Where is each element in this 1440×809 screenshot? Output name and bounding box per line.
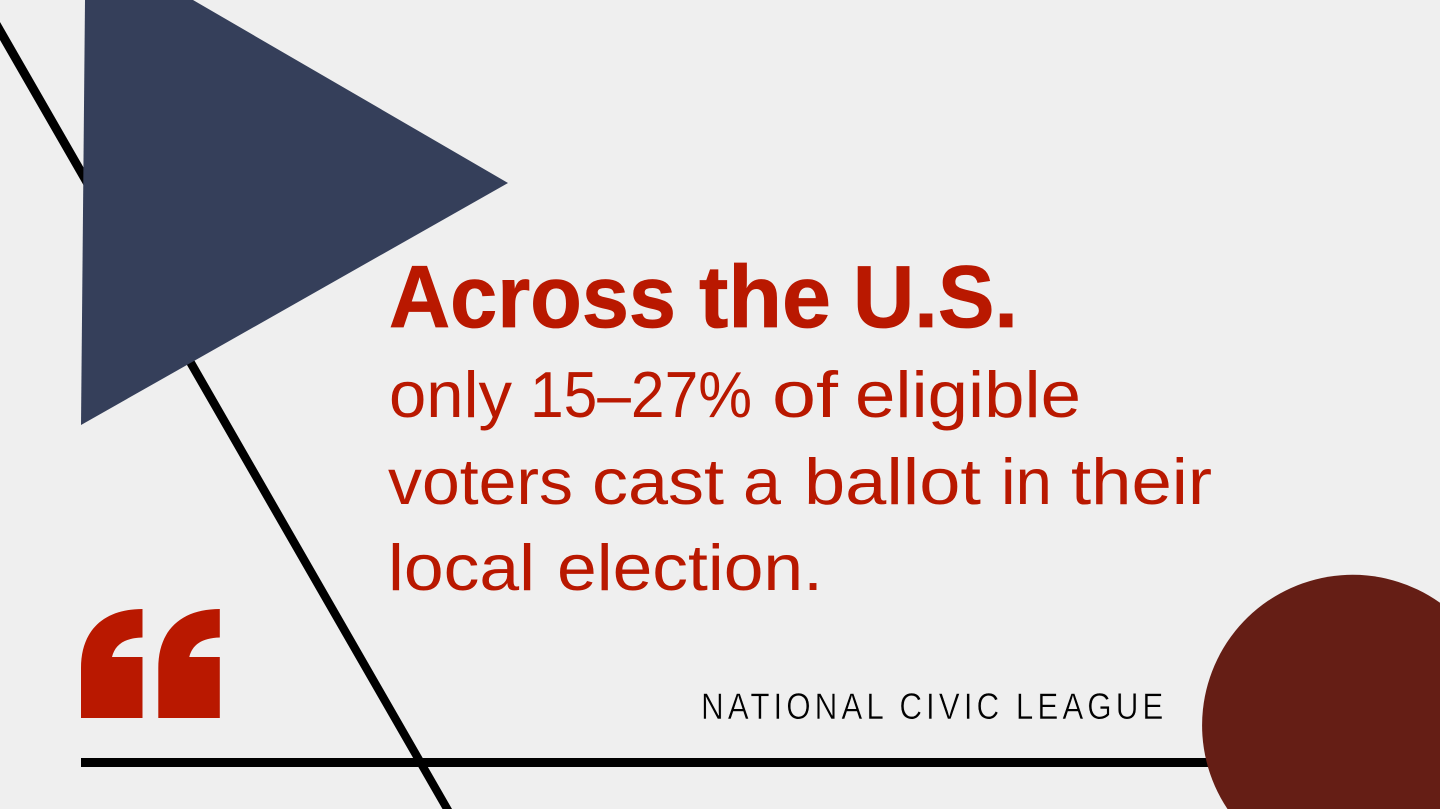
dark red circle [1202, 575, 1440, 809]
statement text: cast [592, 445, 724, 518]
statement text: local [388, 531, 535, 604]
statement text: voters [388, 445, 573, 518]
statement text: ballot [804, 445, 981, 518]
statement text: only [389, 358, 513, 431]
statement text: their [1071, 445, 1212, 518]
statement text: election. [557, 531, 823, 604]
statement text: eligible [855, 358, 1081, 431]
statement text: a [743, 445, 782, 518]
statement text [388, 358, 1212, 604]
statement text: 15–27% [530, 358, 752, 431]
organisation name: NATIONAL CIVIC LEAGUE [701, 687, 1163, 728]
diagonal black line [0, 22, 452, 809]
heading [389, 247, 1018, 346]
icon: quotation marks [81, 609, 220, 718]
heading: U.S. [853, 247, 1018, 346]
heading: Across [389, 247, 676, 346]
horizontal black rule [81, 758, 1216, 767]
statement text: of [772, 358, 839, 431]
heading: the [699, 247, 831, 346]
statement text: in [1001, 445, 1052, 518]
navy triangle [81, 0, 508, 425]
